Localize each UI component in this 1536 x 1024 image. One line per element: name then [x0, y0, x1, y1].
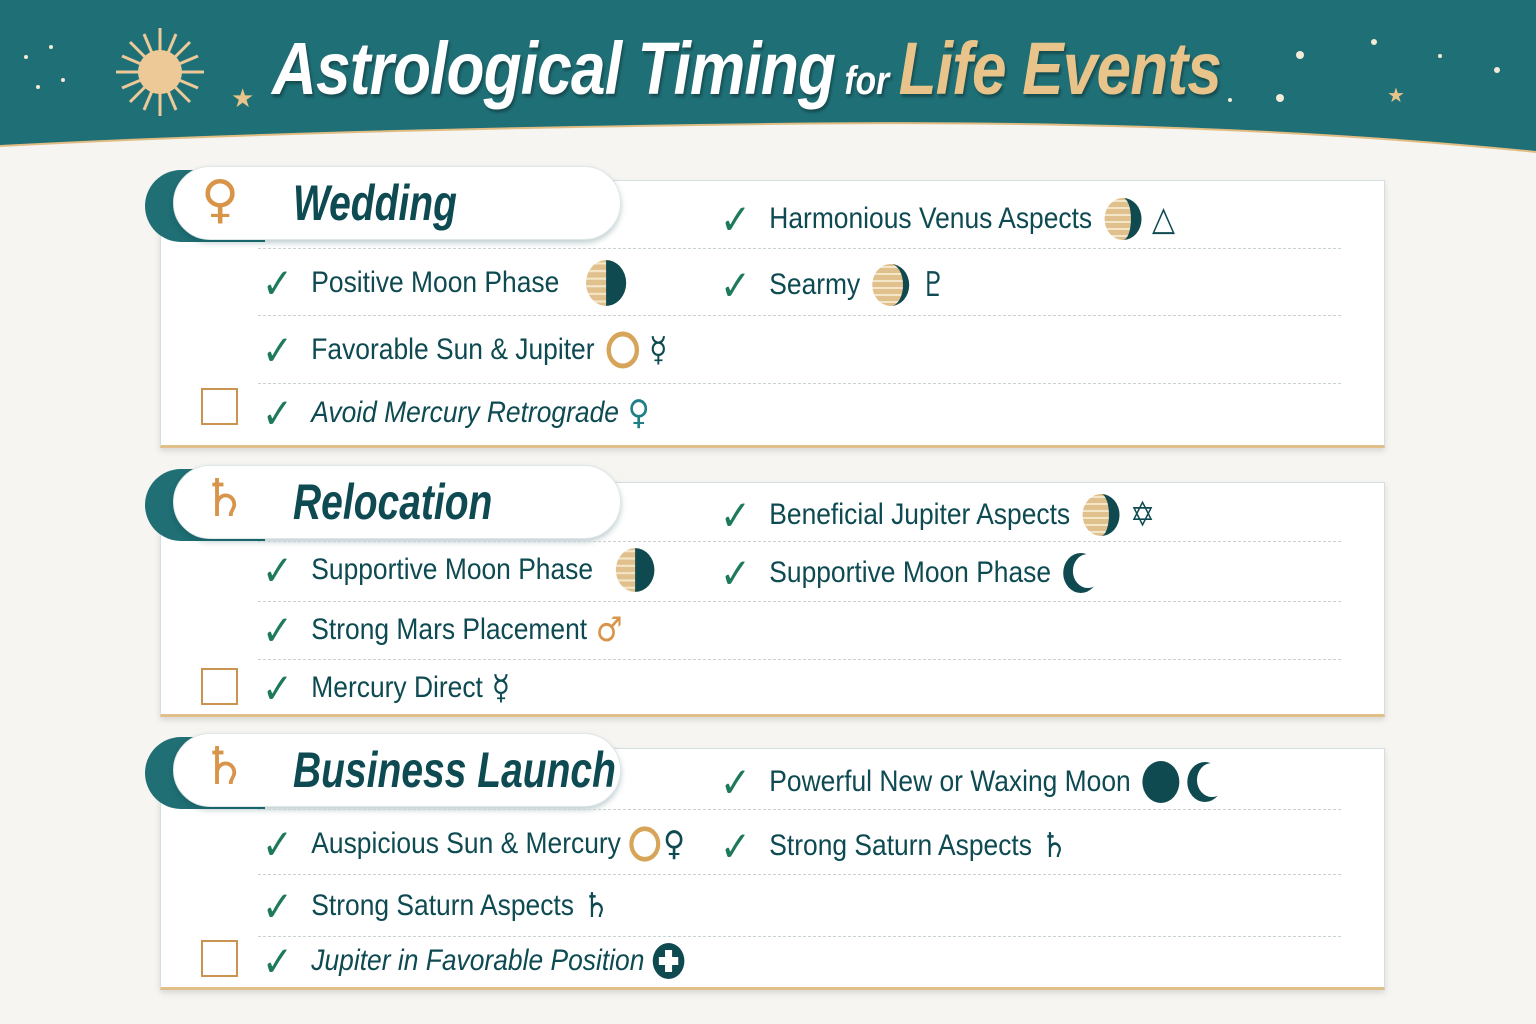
item: Supportive Moon Phase right: Supportive Moon Phase — [769, 556, 1051, 589]
panel: relocation — [145, 465, 1387, 722]
item: Positive Moon Phase: Positive Moon Phase — [311, 266, 559, 299]
item: Mercury Direct: ✓ — [262, 664, 293, 712]
item: Auspicious Sun & Mercury: ✓ — [262, 820, 293, 868]
panel: wedding — [145, 166, 1387, 453]
heading: Relocation — [145, 465, 624, 545]
item: Strong Saturn Aspects right — [720, 822, 1068, 870]
item: Harmonious Venus Aspects: Harmonious Venus Aspects — [769, 202, 1092, 235]
item: Auspicious Sun & Mercury — [262, 820, 685, 868]
item: Beneficial Jupiter Aspects: ✡ — [1130, 495, 1155, 535]
item: Jupiter in Favorable Position: Jupiter in Favorable Position — [311, 944, 644, 977]
item: Supportive Moon Phase left: ✓ — [262, 546, 293, 594]
item: Strong Mars Placement: ♂ — [596, 610, 623, 650]
item: Jupiter in Favorable Position: ✓ — [262, 936, 293, 986]
item: Strong Saturn Aspects right: ♄ — [1041, 826, 1068, 866]
item: Favorable Sun & Jupiter: Favorable Sun & Jupiter — [311, 333, 595, 366]
item: Supportive Moon Phase right: ✓ — [720, 548, 751, 598]
item: Favorable Sun & Jupiter: ✓ — [262, 326, 293, 374]
heading: Business Launch — [145, 733, 624, 813]
item: Mercury Direct: Mercury Direct — [311, 671, 483, 704]
item: Powerful New or Waxing Moon — [720, 758, 1218, 806]
item: Auspicious Sun & Mercury: ♀ — [663, 824, 685, 864]
item: Avoid Mercury Retrograde: ✓ — [262, 388, 293, 438]
heading: Wedding — [145, 166, 624, 246]
item: Powerful New or Waxing Moon: Powerful New or Waxing Moon — [769, 765, 1131, 798]
header banner: ★ — [1387, 85, 1405, 107]
item: Supportive Moon Phase right — [720, 548, 1094, 598]
item: Supportive Moon Phase left — [262, 546, 654, 594]
item: Strong Saturn Aspects right: ✓ — [720, 822, 751, 870]
item: Strong Saturn Aspects left: Strong Saturn Aspects — [311, 889, 574, 922]
item: Jupiter in Favorable Position — [262, 936, 684, 986]
item: Avoid Mercury Retrograde: Avoid Mercury Retrograde — [311, 396, 619, 429]
checkbox — [201, 940, 238, 977]
item: Positive Moon Phase — [262, 258, 626, 308]
heading: Wedding: Wedding — [293, 175, 457, 231]
item: Harmonious Venus Aspects — [720, 194, 1175, 244]
item: Favorable Sun & Jupiter: ☿ — [649, 330, 667, 370]
heading: Relocation: Relocation — [293, 474, 492, 530]
item: Beneficial Jupiter Aspects — [720, 490, 1155, 540]
item: Searmy: ♇ — [920, 265, 947, 305]
item: Beneficial Jupiter Aspects: Beneficial Jupiter Aspects — [769, 498, 1070, 531]
item: Supportive Moon Phase left: Supportive Moon Phase — [311, 553, 593, 586]
item: Harmonious Venus Aspects: ✓ — [720, 194, 751, 244]
item: Harmonious Venus Aspects: △ — [1152, 199, 1175, 239]
heading: Relocation: ♄ — [201, 469, 248, 529]
heading: Wedding: ♀ — [201, 170, 239, 230]
item: Searmy: Searmy — [769, 268, 860, 301]
checkbox — [201, 668, 238, 705]
item: Strong Mars Placement — [262, 606, 623, 654]
item: Powerful New or Waxing Moon: ✓ — [720, 758, 751, 806]
item: Beneficial Jupiter Aspects: ✓ — [720, 490, 751, 540]
item: Avoid Mercury Retrograde: ♀ — [628, 393, 650, 433]
item: Strong Saturn Aspects left: ✓ — [262, 882, 293, 930]
header banner: ★ — [231, 83, 254, 113]
title: Astrological Timing for Life Events — [272, 27, 1221, 110]
item: Strong Saturn Aspects left: ♄ — [583, 886, 610, 926]
item: Favorable Sun & Jupiter — [262, 326, 667, 374]
item: Searmy — [720, 260, 947, 310]
panel: business launch — [145, 733, 1387, 995]
item: Mercury Direct — [262, 664, 510, 712]
item: Positive Moon Phase: ✓ — [262, 258, 293, 308]
item: Searmy: ✓ — [720, 260, 751, 310]
checkbox — [201, 388, 238, 425]
heading: Business Launch: Business Launch — [293, 742, 616, 798]
header banner — [0, 0, 1536, 153]
item: Strong Mars Placement: Strong Mars Placement — [311, 613, 587, 646]
item: Strong Mars Placement: ✓ — [262, 606, 293, 654]
item: Auspicious Sun & Mercury: Auspicious Sun & Mercury — [311, 827, 621, 860]
item: Avoid Mercury Retrograde — [262, 388, 650, 438]
heading: Business Launch: ♄ — [201, 737, 248, 797]
item: Strong Saturn Aspects right: Strong Saturn Aspects — [769, 829, 1032, 862]
item: Mercury Direct: ☿ — [492, 668, 510, 708]
item: Strong Saturn Aspects left — [262, 882, 610, 930]
